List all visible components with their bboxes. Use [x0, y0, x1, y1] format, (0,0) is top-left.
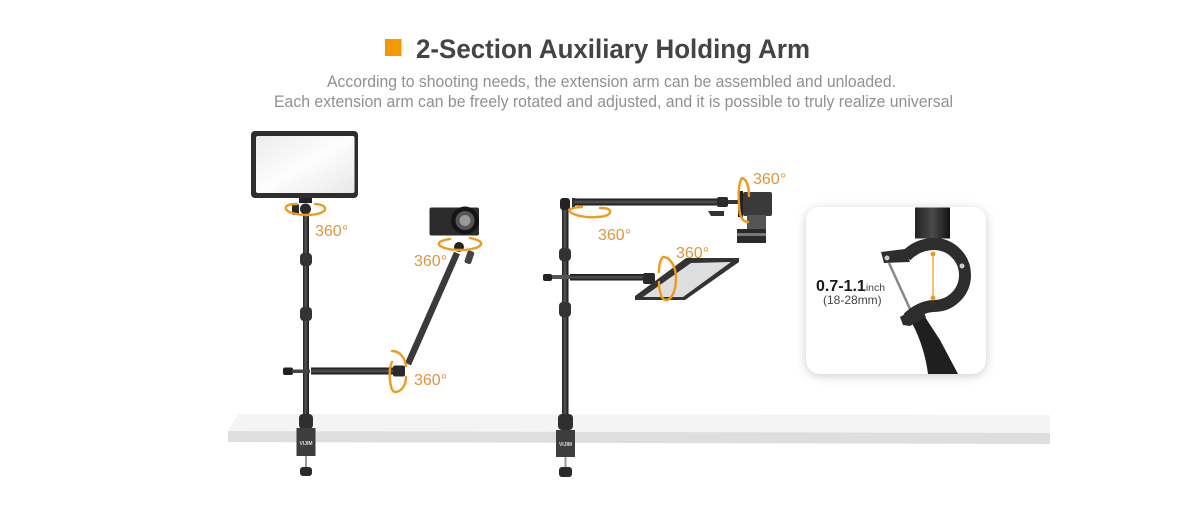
measurement line — [930, 252, 936, 300]
clamp: VIJIM — [299, 441, 313, 447]
size label — [816, 278, 885, 307]
label: 360 arm joint: 360° — [414, 372, 447, 389]
callout card: clamp size — [806, 207, 986, 374]
label: 360 panel: 360° — [676, 245, 709, 262]
arrow: top arm rotation — [569, 207, 610, 217]
icon: orange square — [385, 39, 402, 56]
vertical pole — [559, 198, 571, 415]
right stand assembly — [543, 191, 772, 477]
description text — [274, 73, 953, 111]
horizontal arm — [283, 366, 405, 376]
camera — [430, 206, 479, 236]
desk shelf — [228, 414, 1050, 444]
heading — [385, 34, 810, 64]
rotation arrows and 360 labels — [286, 171, 786, 392]
title: 2-Section Auxiliary Holding Arm — [416, 34, 810, 64]
camera — [737, 191, 772, 243]
clamp — [296, 414, 316, 476]
description text: Each extension arm can be freely rotated and adjusted, and it is possible to truly realize universal — [274, 93, 953, 111]
arrow: light panel rotation — [286, 204, 325, 215]
left stand assembly — [251, 131, 479, 476]
light panel — [251, 131, 358, 203]
description text: According to shooting needs, the extension arm can be assembled and unloaded. — [327, 73, 896, 91]
label: 360 top arm: 360° — [598, 227, 631, 244]
size label: 0.7-1.1inch — [816, 278, 885, 295]
upper arm — [572, 197, 738, 216]
size label: (18-28mm) — [823, 293, 882, 307]
arrow: camera rotation — [439, 238, 481, 250]
arrow: panel rotation — [659, 257, 676, 300]
arrow: upper camera rotation — [739, 178, 749, 222]
label: 360 camera: 360° — [414, 253, 447, 270]
arrow: arm joint rotation — [390, 351, 406, 392]
label: 360 upper camera: 360° — [753, 171, 786, 188]
clamp: VIJIM — [559, 442, 572, 448]
lower arm — [543, 273, 655, 284]
clamp detail — [881, 208, 965, 374]
teleprompter panel — [635, 258, 739, 300]
label: 360 light panel: 360° — [315, 223, 348, 240]
diagonal arm — [408, 242, 475, 364]
vertical pole — [292, 204, 312, 418]
clamp — [556, 414, 575, 477]
